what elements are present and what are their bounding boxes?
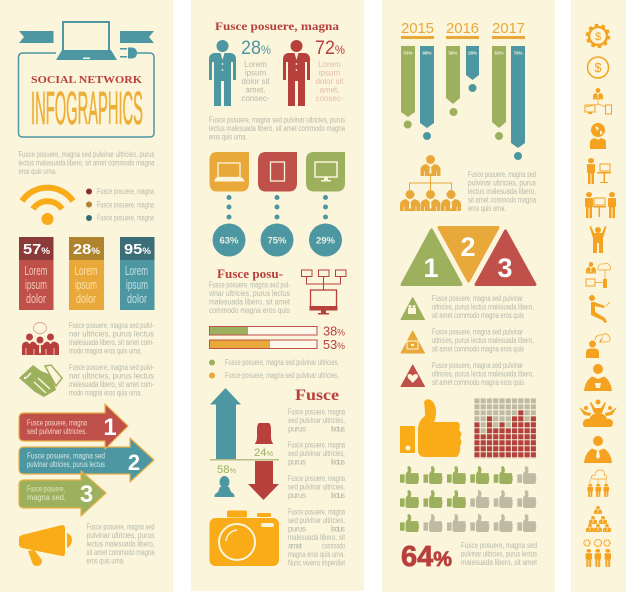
red man caption: ipsum	[319, 68, 341, 78]
legend: Fusce posuere, magna	[97, 187, 154, 196]
handshake text: modo magna eros quis urna.	[69, 388, 142, 398]
stat: 64%: 64%	[401, 541, 452, 573]
column text	[288, 408, 346, 568]
column text: purus	[288, 491, 306, 500]
man caption: dolor sit	[241, 77, 270, 86]
arrow: 3	[19, 471, 106, 516]
tile: laptop	[210, 152, 249, 192]
arrow: 3: magna sed.	[27, 493, 66, 502]
arrow: 3: 3	[80, 481, 93, 508]
icon: org chart	[400, 155, 461, 211]
stat card: 95%: 95%	[124, 241, 151, 258]
handshake text: nar ultricies, purus lectus	[69, 372, 154, 380]
megaphone text	[86, 522, 155, 566]
progress legend: Fusce posuere, magna sed pulvinar ultricies,	[225, 358, 339, 367]
team text: modo magna eros quis urna.	[69, 346, 142, 356]
bullet text 3	[432, 361, 534, 387]
icon: team with speech bubble	[22, 322, 59, 355]
triangle: 2	[439, 228, 498, 281]
icon: presenter	[587, 158, 611, 184]
text: INFOGRAPHICS	[31, 82, 143, 134]
bar: 2015 green: 53%	[403, 50, 413, 56]
arrow: 2: pulvinar ultricies, purus lectus	[27, 460, 105, 469]
megaphone text: pulvinar ultricies, purus	[86, 531, 154, 540]
icon: sitting with laptop	[589, 295, 610, 323]
column text: sed pulvinar ultricies,	[288, 482, 345, 492]
arrow: up	[210, 388, 241, 459]
stat card: 28%	[69, 237, 104, 310]
progress bar: 38%: 38%	[323, 324, 345, 338]
arrow: 1: 1	[103, 414, 117, 441]
column text: lectus	[331, 424, 345, 434]
icon: businessman with cup	[584, 364, 612, 391]
team text: malesuada libero, sit amet com-	[69, 338, 154, 347]
red man caption: amet,	[319, 86, 340, 94]
bar: 2015 teal: 68%	[422, 50, 432, 56]
column text: sed pulvinar ultricies,	[288, 416, 345, 425]
legend: Fusce posuere, magna	[97, 214, 154, 222]
baseline	[210, 459, 279, 460]
stat: 58%: 58%	[217, 464, 236, 476]
icon: person and devices	[585, 88, 612, 114]
org chart text: Fusce posuere, magna sed	[468, 170, 536, 179]
triangle: 2: 2	[460, 232, 476, 262]
handshake text: Fusce posuere, magna sed pulvi-	[69, 363, 154, 372]
figure: red man 72%	[283, 40, 310, 106]
years: 2016	[446, 20, 479, 37]
column text: purus	[288, 458, 306, 466]
paragraph	[209, 116, 345, 142]
triangle: 3	[476, 231, 535, 284]
column text: amet	[288, 542, 303, 550]
column text: Fusce posuere, magna	[288, 474, 345, 483]
bullet text 1: ultricies, purus lectus malesuada libero,	[432, 302, 534, 312]
years: 2015	[401, 20, 434, 37]
man caption: consec-	[241, 94, 270, 103]
bar: 2016 teal: 28%	[468, 50, 477, 56]
bullet text 1	[432, 294, 534, 320]
stat card: 57%: dolor	[26, 291, 46, 306]
bullet: video triangle	[401, 298, 424, 320]
icon: handshake	[19, 365, 62, 397]
stat card: 57%: Lorem	[24, 263, 48, 278]
network text: Fusce posuere, magna sed pul-	[209, 280, 290, 290]
heading: fusce posuere: Fusce posuere, magna	[215, 19, 339, 33]
icon: two people at chart	[585, 192, 616, 218]
handshake text	[69, 363, 154, 398]
title frame	[18, 53, 154, 137]
panel: demographics and devices	[191, 0, 364, 591]
arrow: 1: sed pulvinar ultricies.	[27, 427, 87, 436]
icon: people on cloud	[579, 400, 617, 427]
stat: 72%: 72%	[315, 38, 345, 59]
man caption: Lorem	[244, 60, 267, 69]
bar: 2015 teal	[420, 46, 434, 140]
stat card: 28%: dolor	[76, 291, 96, 306]
stat card: 57%	[19, 237, 54, 310]
arrow: down	[248, 461, 279, 500]
bullet text 1: sit amet commodo magna eros quis	[432, 311, 524, 320]
stat text	[461, 541, 538, 567]
megaphone text: lectus malesuada libero,	[86, 540, 154, 548]
stat card: 28%: ipsum	[75, 277, 97, 292]
panel: social network intro	[0, 0, 173, 592]
arrow: 1: Fusce posuere, magna	[27, 418, 87, 428]
network text: malesuada libero, sit amet	[209, 298, 291, 306]
man caption: ipsum	[245, 68, 267, 78]
bar: 2016 teal	[466, 46, 479, 92]
legend	[86, 187, 154, 222]
team text: Fusce posuere, magna sed pulvi-	[69, 321, 154, 330]
column text: sed pulvinar ultricies,	[288, 449, 345, 458]
icon: globe person	[590, 123, 606, 149]
man caption	[241, 60, 270, 103]
org chart text: lectus malesuada libero,	[468, 187, 536, 196]
bullet text 2	[432, 328, 534, 354]
bar: 2015 green	[401, 46, 415, 128]
stat card: 95%: dolor	[127, 291, 147, 306]
legend: Fusce posuere, magna	[97, 200, 154, 210]
icon: laptop	[56, 22, 117, 60]
bar: 2017 teal	[511, 46, 525, 160]
column text: purus	[288, 524, 306, 534]
ribbon: right	[120, 31, 154, 43]
panel: yearly data and likes	[382, 0, 555, 592]
bar: 2016 green: 58%	[448, 50, 458, 56]
connector dots	[226, 195, 328, 220]
circle stat: 29%: 29%	[316, 236, 336, 246]
icon: person cloud devices	[586, 262, 611, 288]
circle stat: 63%: 63%	[219, 236, 239, 246]
icon: person	[214, 476, 235, 497]
bullet text 3: ultricies, purus lectus malesuada libero,	[432, 370, 534, 378]
bullet: heart triangle	[401, 365, 424, 386]
progress legend	[209, 358, 339, 380]
progress legend: Fusce posuere, magna sed pulvinar ultricies,	[225, 371, 339, 380]
triangle: 1: 1	[423, 253, 439, 283]
years	[401, 20, 525, 37]
arrow: 2: 2	[128, 450, 140, 475]
stat card: 28%: 28%	[73, 241, 100, 258]
intro text: lectus malesuada libero, sit amet commodo magna	[18, 158, 155, 168]
triangle: 3: 3	[497, 253, 513, 283]
bullet text 3: sit amet commodo magna eros quis	[432, 378, 524, 387]
red man caption: Lorem	[318, 60, 341, 69]
team text: nar ultricies, purus lectus	[69, 330, 154, 338]
bullet text 2: Fusce posuere, magna sed pulvinar	[432, 328, 523, 336]
stat card: 95%: ipsum	[126, 277, 148, 292]
icon: network of monitors	[302, 270, 346, 314]
arrow: 2	[19, 438, 154, 482]
icon: person with cloud idea	[586, 334, 610, 358]
org chart text	[468, 170, 536, 213]
org chart text: sit amet commodo magna	[468, 196, 536, 204]
triangle: 1	[402, 230, 461, 284]
org chart text: eros quis urna.	[468, 204, 506, 213]
bar: 2017 green: 63%	[494, 50, 504, 56]
tile: monitor	[306, 152, 345, 192]
red man caption: consec-	[315, 94, 344, 103]
stat text: malesuada libero, sit amet	[461, 558, 538, 567]
years: 2017	[492, 20, 525, 37]
bullet text 2: ultricies, purus lectus malesuada libero,	[432, 336, 534, 345]
megaphone text: eros quis urna.	[86, 556, 124, 566]
icon: coin dollar: $	[594, 60, 602, 75]
column text: commodo	[322, 542, 345, 550]
icon: businessman	[584, 436, 612, 463]
year rules	[401, 36, 525, 39]
column text: Fusce posuere, magna	[288, 440, 345, 450]
icon: gears and people	[584, 540, 611, 567]
paragraph: eros quis urna.	[209, 132, 247, 142]
icon: gear dollar	[587, 25, 609, 47]
thumbs grid	[400, 466, 536, 532]
bullet text 1: Fusce posuere, magna sed pulvinar	[432, 294, 523, 303]
icon: megaphone	[19, 525, 72, 566]
column text: Nunc viverra imperdiet	[288, 558, 346, 568]
icon: coin dollar	[588, 57, 608, 78]
stat: 24%: 24%	[254, 447, 273, 459]
progress bar: 53%: 53%	[323, 337, 345, 352]
tile: tablet	[258, 152, 297, 192]
column text: lectus	[331, 458, 345, 466]
network text: vinar ultricies, purus lectus	[209, 289, 290, 298]
bar: 2017 teal: 79%	[513, 50, 523, 56]
ribbon: left	[19, 31, 54, 43]
stat card: 95%: Lorem	[125, 263, 148, 278]
bullet text 3: Fusce posuere, magna sed pulvinar	[432, 361, 523, 370]
red man caption	[315, 60, 344, 103]
stat: 28%: 28%	[241, 38, 271, 59]
column text: purus	[288, 424, 306, 434]
icon: plug	[120, 48, 137, 58]
stat card: 28%: Lorem	[74, 263, 98, 278]
handshake text: malesuada libero, sit amet com-	[69, 380, 154, 389]
column text: sed pulvinar ultricies,	[288, 516, 345, 525]
paragraph: lectus malesuada libero, sit amet commodo magna	[209, 124, 345, 133]
circle stat: 29%	[309, 224, 342, 256]
circle stat: 75%	[260, 224, 294, 256]
network text: commodo magna eros quis	[209, 306, 290, 315]
circle stat: 75%: 75%	[267, 236, 287, 246]
icon: pyramid team	[586, 506, 611, 532]
bar: 2017 green	[492, 46, 506, 140]
heading: fusce: Fusce	[295, 387, 339, 404]
waffle chart	[474, 398, 537, 458]
team text	[69, 321, 154, 356]
heading: fusce posu: Fusce posu-	[217, 266, 283, 281]
figure: man 28%	[209, 40, 236, 106]
icon: woman	[255, 423, 273, 444]
arrow: 2: Fusce posuere, magna sed	[27, 452, 105, 460]
column text: Fusce posuere, magna	[288, 508, 345, 516]
circle stat: 63%	[212, 224, 246, 256]
icon: big thumbs up	[400, 399, 462, 457]
red man caption: dolor sit	[315, 77, 344, 86]
stat text: Fusce posuere, magna sed	[461, 541, 537, 550]
column text: magna eros quis urna.	[288, 550, 345, 559]
column text: malesuada libero, sit	[288, 533, 346, 542]
arrow: 3: Fusce posuere,	[27, 484, 65, 494]
stat text: pulvinar ultricies, purus lectus	[461, 550, 537, 558]
man caption: amet,	[245, 86, 266, 94]
icon: camera	[210, 510, 279, 566]
paragraph: Fusce posuere, magna sed pulvinar ultricies, purus	[209, 116, 345, 124]
stat card: 95%	[120, 237, 154, 310]
bullet text 2: sit amet commodo magna eros quis	[432, 344, 524, 354]
icon: wifi	[22, 188, 73, 225]
intro text: eros quis urna.	[18, 167, 56, 176]
column text: lectus	[331, 524, 345, 534]
icon: arms raised	[590, 226, 606, 253]
stat card: 57%: ipsum	[25, 277, 47, 292]
megaphone text: Fusce posuere, magna sed	[86, 522, 154, 532]
icon: gear dollar: $	[595, 31, 601, 43]
progress bar: 38%	[210, 324, 345, 338]
intro text	[18, 150, 155, 176]
intro text: Fusce posuere, magna sed pulvinar ultricies, purus	[18, 150, 154, 159]
progress bar: 53%	[210, 337, 345, 352]
panel: icon strip	[571, 0, 626, 592]
column text: lectus	[331, 491, 345, 500]
megaphone text: sit amet commodo magna	[86, 548, 155, 557]
arrow: 1	[19, 404, 128, 449]
network text	[209, 280, 291, 315]
stat card: 57%: 57%	[23, 241, 50, 258]
icon: team under cloud	[587, 470, 609, 497]
org chart text: pulvinar ultricies, purus	[468, 178, 536, 188]
column text: Fusce posuere, magna	[288, 408, 345, 416]
bullet: screen triangle	[401, 331, 424, 353]
heading: social network: SOCIAL NETWORK	[31, 74, 142, 86]
bar: 2016 green	[446, 46, 460, 116]
